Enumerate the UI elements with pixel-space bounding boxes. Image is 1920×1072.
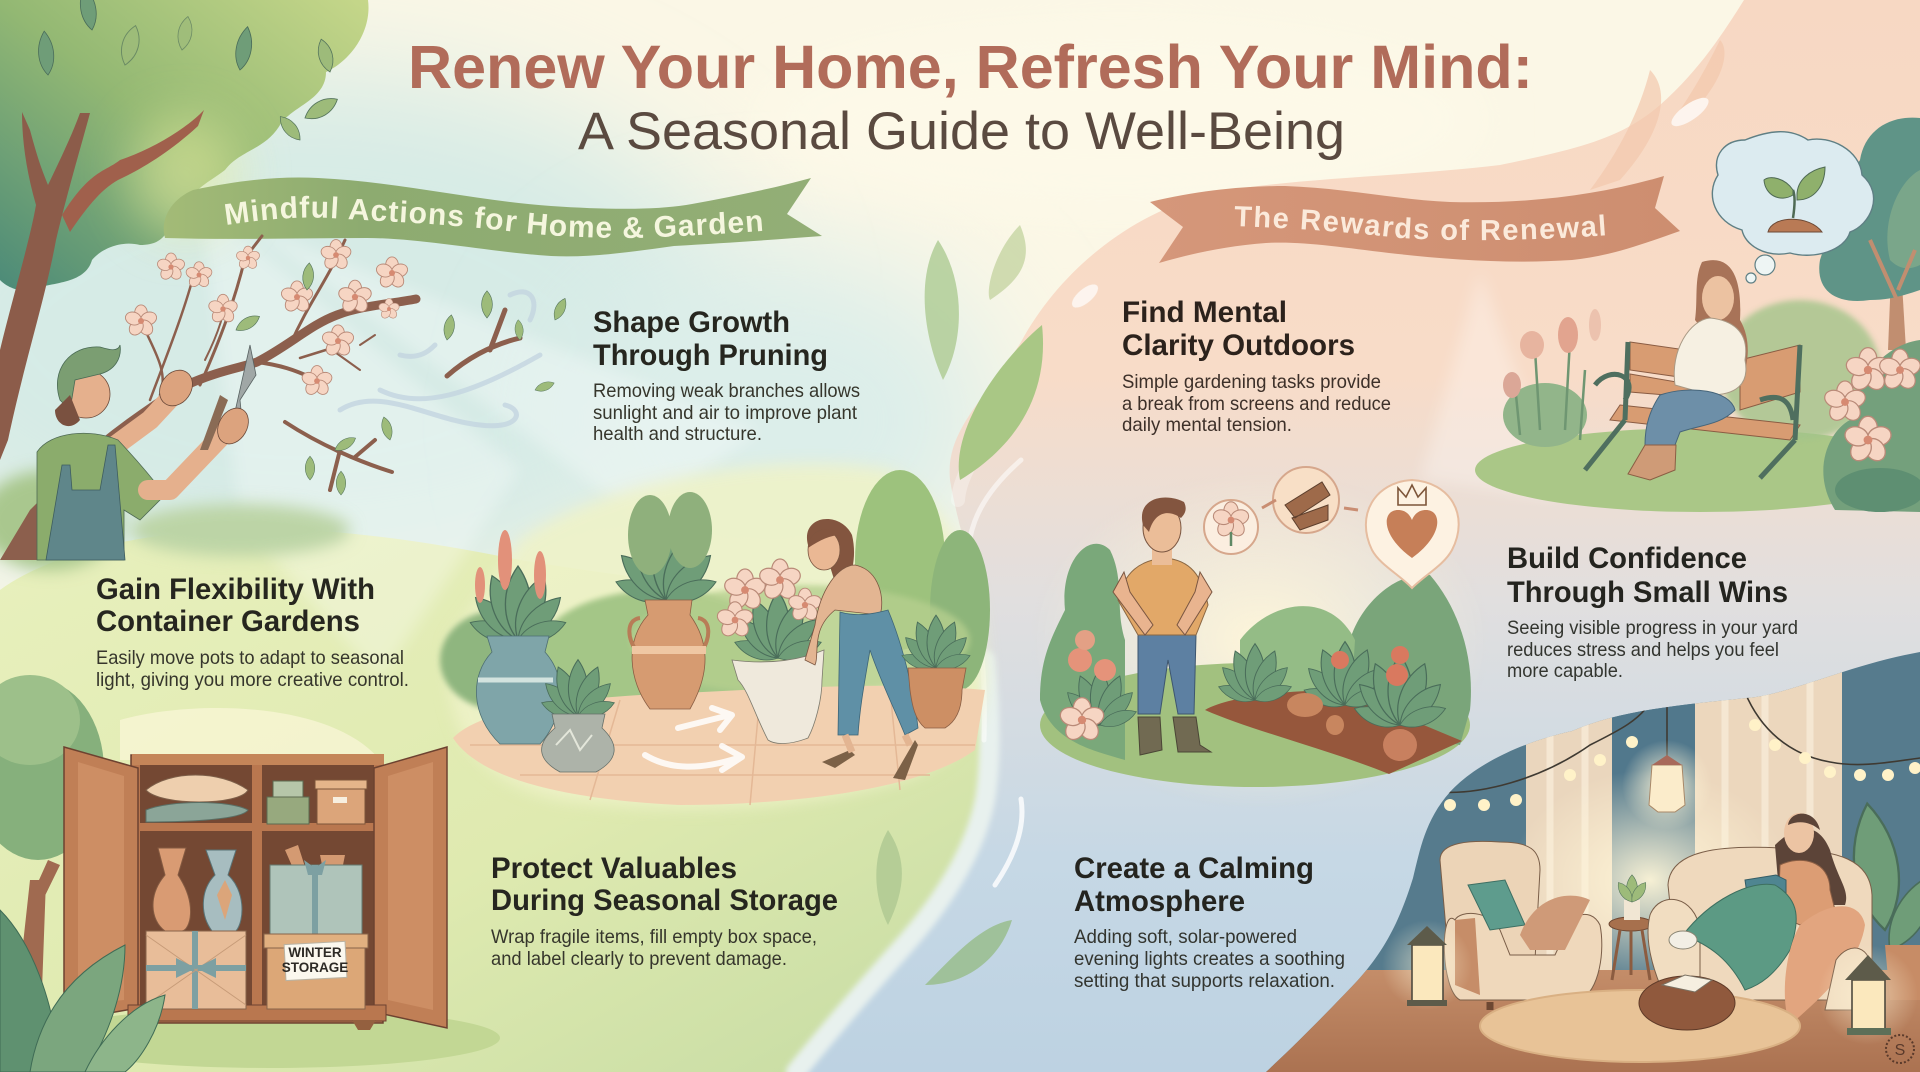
text: Shape Growth	[593, 306, 860, 445]
flowers left of bench	[1503, 309, 1601, 447]
armchair left	[1440, 841, 1602, 1010]
pruning scene: branches and blossoms	[20, 236, 416, 530]
pruned twigs and wind	[285, 291, 569, 495]
right tree	[1819, 118, 1920, 350]
soil bed	[1205, 690, 1462, 774]
icon: heart and crown	[1366, 480, 1459, 588]
pillows	[146, 775, 248, 822]
text: Gain Flexibility: Easily move pots to adapt to seasonal	[96, 647, 404, 669]
text: Build Confidence: Build Confidence	[1507, 542, 1747, 575]
text: Gain Flexibility: light, giving you more creative control.	[96, 669, 409, 691]
overalls	[46, 445, 125, 560]
banner: The Rewards of Renewal	[1150, 176, 1680, 263]
gardener scene	[1030, 467, 1490, 810]
text: Gain Flexibility	[96, 573, 409, 691]
text: Create a Calming: setting that supports relaxation.	[1074, 970, 1335, 992]
text: Create a Calming: Atmosphere	[1074, 885, 1245, 918]
text: Gain Flexibility: Container Gardens	[96, 605, 360, 638]
near arm	[148, 425, 232, 490]
bush right of bench	[1822, 340, 1920, 512]
title	[408, 33, 1533, 161]
text: Shape Growth: Removing weak branches allows	[593, 380, 860, 402]
text: Shape Growth: sunlight and air to improve plant	[593, 402, 858, 424]
text: Build Confidence: more capable.	[1507, 660, 1623, 682]
patio scene: container gardens	[440, 464, 990, 808]
blue vase with flowers	[467, 530, 569, 744]
evening patio scene	[1250, 640, 1920, 1072]
wooden bench	[1585, 342, 1800, 478]
side table with plant	[1609, 875, 1653, 980]
central leaves	[876, 225, 1043, 985]
text: Create a Calming: Adding soft, solar-powered	[1074, 926, 1297, 948]
cardboard winter storage box: STORAGE	[282, 960, 348, 975]
arrows on the patio	[645, 708, 742, 770]
text: Create a Calming: Create a Calming	[1074, 852, 1314, 885]
text: Build Confidence: reduces stress and helps you feel	[1507, 639, 1779, 661]
rug	[1480, 990, 1800, 1062]
title: A Seasonal Guide to Well-Being	[578, 102, 1345, 161]
small right pot	[900, 615, 972, 728]
seal	[1886, 1035, 1914, 1063]
clear storage box	[270, 845, 362, 934]
swoosh: pale ribbon	[796, 395, 1022, 1072]
background plant, right	[1846, 801, 1920, 1000]
cardboard winter storage box: WINTER	[288, 945, 342, 960]
head and cap	[62, 370, 110, 418]
lantern right	[1823, 950, 1912, 1040]
pouf and open book	[1639, 975, 1735, 1030]
armchair right with reading woman	[1648, 813, 1872, 1025]
string lights	[1438, 690, 1920, 811]
shelf boxes	[267, 780, 367, 824]
vegetable rows	[1216, 642, 1448, 761]
far arm	[116, 392, 176, 445]
small grey pot	[539, 660, 617, 772]
background tree, lower left	[0, 675, 104, 990]
text: Protect Valuables	[491, 852, 838, 970]
woman arranging pot	[805, 519, 918, 780]
text: Shape Growth: Shape Growth	[593, 306, 790, 339]
panel: green lower-left region	[0, 529, 991, 1072]
terracotta vase with herb	[613, 492, 719, 709]
text: Build Confidence: Through Small Wins	[1507, 576, 1788, 609]
text: Find Mental Clarity: a break from screens and reduce	[1122, 393, 1391, 415]
banner: Mindful Actions: Mindful Actions for Home & Garden	[225, 196, 762, 238]
text: Protect Valuables: and label clearly to prevent damage.	[491, 948, 787, 970]
patio floor	[453, 686, 985, 805]
vases	[153, 848, 242, 931]
pruner person	[0, 345, 350, 570]
text: Protect Valuables: During Seasonal Storage	[491, 884, 838, 917]
text: Find Mental Clarity: daily mental tension.	[1122, 414, 1292, 436]
text: Build Confidence	[1507, 542, 1798, 682]
shirt	[37, 433, 165, 560]
proud man	[1113, 497, 1212, 755]
thought bubble: sprout	[1712, 132, 1874, 283]
tree: top-left canopy	[0, 0, 369, 460]
shears and glove	[232, 345, 256, 433]
icon: logs	[1273, 467, 1339, 533]
text: Create a Calming	[1074, 852, 1345, 992]
hanging lantern	[1624, 707, 1699, 826]
banner: Mindful Actions	[164, 178, 822, 296]
panel: rewards region	[796, 0, 1920, 1072]
text: Gain Flexibility: Gain Flexibility With	[96, 573, 375, 606]
text: Find Mental Clarity: Clarity Outdoors	[1122, 329, 1355, 362]
text: Find Mental Clarity	[1122, 296, 1391, 436]
cabinet: winter storage	[40, 708, 500, 1068]
text: Build Confidence: Seeing visible progress in your yard	[1507, 617, 1798, 639]
text: Protect Valuables: Wrap fragile items, fill empty box space,	[491, 926, 817, 948]
text: Shape Growth: Through Pruning	[593, 339, 828, 372]
foreground leaves, lower left	[0, 910, 165, 1072]
text: Protect Valuables: Protect Valuables	[491, 852, 737, 885]
title: Renew Your Home, Refresh Your Mind:	[408, 33, 1533, 101]
sun rays	[200, 200, 1560, 680]
decorative peach petals	[1068, 40, 1725, 312]
text: Create a Calming: evening lights creates a soothing	[1074, 948, 1345, 970]
cardboard winter storage box	[264, 934, 368, 1009]
arrows between icons	[1262, 500, 1358, 510]
wrapped gift	[146, 931, 246, 1009]
text: Find Mental Clarity: Find Mental	[1122, 296, 1287, 329]
text: Shape Growth: health and structure.	[593, 423, 762, 445]
white pot with flowers	[715, 559, 824, 744]
icon: flower progress	[1204, 500, 1258, 554]
banner: The Rewards of Renewal: The Rewards of Renewal	[1234, 206, 1605, 240]
text: Find Mental Clarity: Simple gardening tasks provide	[1122, 371, 1381, 393]
lantern left	[1386, 924, 1466, 1006]
left flowers	[1058, 630, 1139, 743]
seal: S	[1895, 1042, 1905, 1059]
bench scene	[1475, 260, 1920, 512]
seated woman	[1628, 260, 1748, 480]
